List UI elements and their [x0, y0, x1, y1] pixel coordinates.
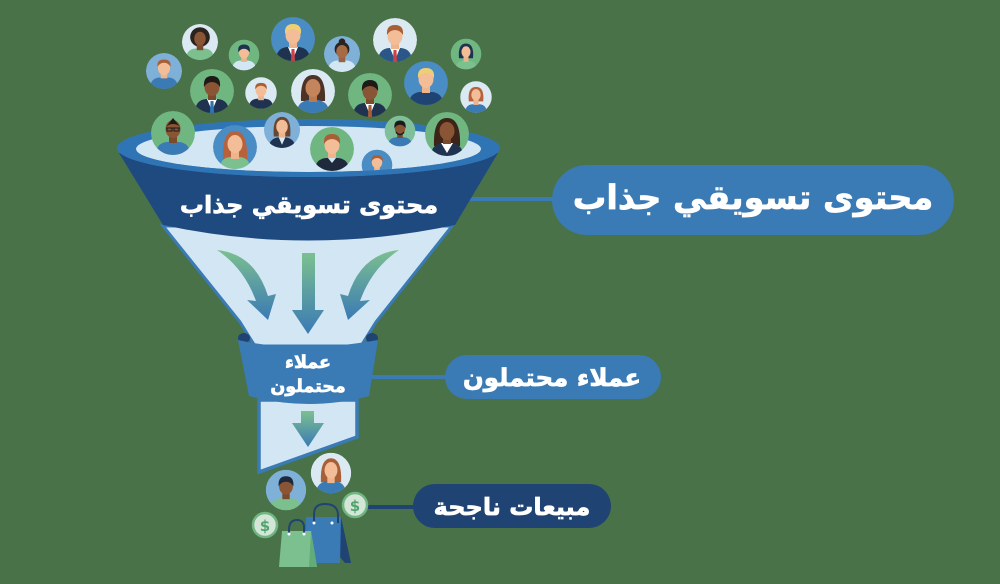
arrow: centre [292, 253, 324, 334]
pill: potential customers [445, 355, 661, 399]
person 15 [213, 125, 257, 169]
person 9 [245, 77, 277, 109]
customer: man [266, 470, 306, 510]
connector: bottom label [366, 505, 416, 509]
connector: top label [470, 197, 554, 201]
person 7 [451, 39, 481, 69]
funnel top body [117, 119, 500, 240]
person 14 [151, 111, 195, 155]
person 4 [271, 17, 315, 61]
person 2 [182, 24, 218, 60]
arrow: spout down [292, 411, 324, 447]
customer: woman [311, 453, 351, 493]
person 17 [310, 127, 354, 171]
person 3 [229, 40, 259, 70]
arrow: right curved [340, 250, 399, 320]
icon: dollar coin right [343, 493, 367, 517]
pill: attractive marketing content: محتوى تسويقي جذاب [573, 178, 933, 218]
crowd of people [146, 17, 492, 180]
funnel lower spout [259, 400, 357, 472]
pill: successful sales [413, 484, 611, 528]
pill: potential customers: عملاء محتملون [463, 363, 641, 392]
person 18 [362, 150, 392, 171]
funnel front rim [117, 148, 500, 177]
neck label [270, 353, 346, 397]
person 13 [460, 81, 492, 113]
neck label: محتملون [270, 377, 346, 397]
connector: middle label [370, 375, 448, 379]
funnel band label: محتوى تسويقي جذاب [180, 191, 438, 219]
person 5 [324, 36, 360, 72]
person 20 [425, 112, 469, 156]
person 1 [146, 53, 182, 89]
person 10 [291, 69, 335, 113]
icon: green shopping bag [279, 520, 317, 567]
person 6 [373, 18, 417, 62]
funnel neck band [238, 333, 378, 404]
person 8 [190, 69, 234, 113]
pill: successful sales: مبيعات ناجحة [434, 493, 590, 521]
icon: dollar coin left: $ [260, 517, 270, 535]
arrow: left curved [217, 250, 276, 320]
person 12 [404, 61, 448, 105]
icon: blue shopping bag [306, 504, 351, 563]
icon: dollar coin left [253, 513, 277, 537]
person 16 [264, 112, 300, 148]
person 19 [385, 116, 415, 146]
person 11 [348, 73, 392, 117]
pill: attractive marketing content [552, 165, 954, 235]
funnel cone [163, 226, 452, 346]
neck label: عملاء [285, 353, 331, 373]
icon: dollar coin right: $ [350, 497, 360, 515]
